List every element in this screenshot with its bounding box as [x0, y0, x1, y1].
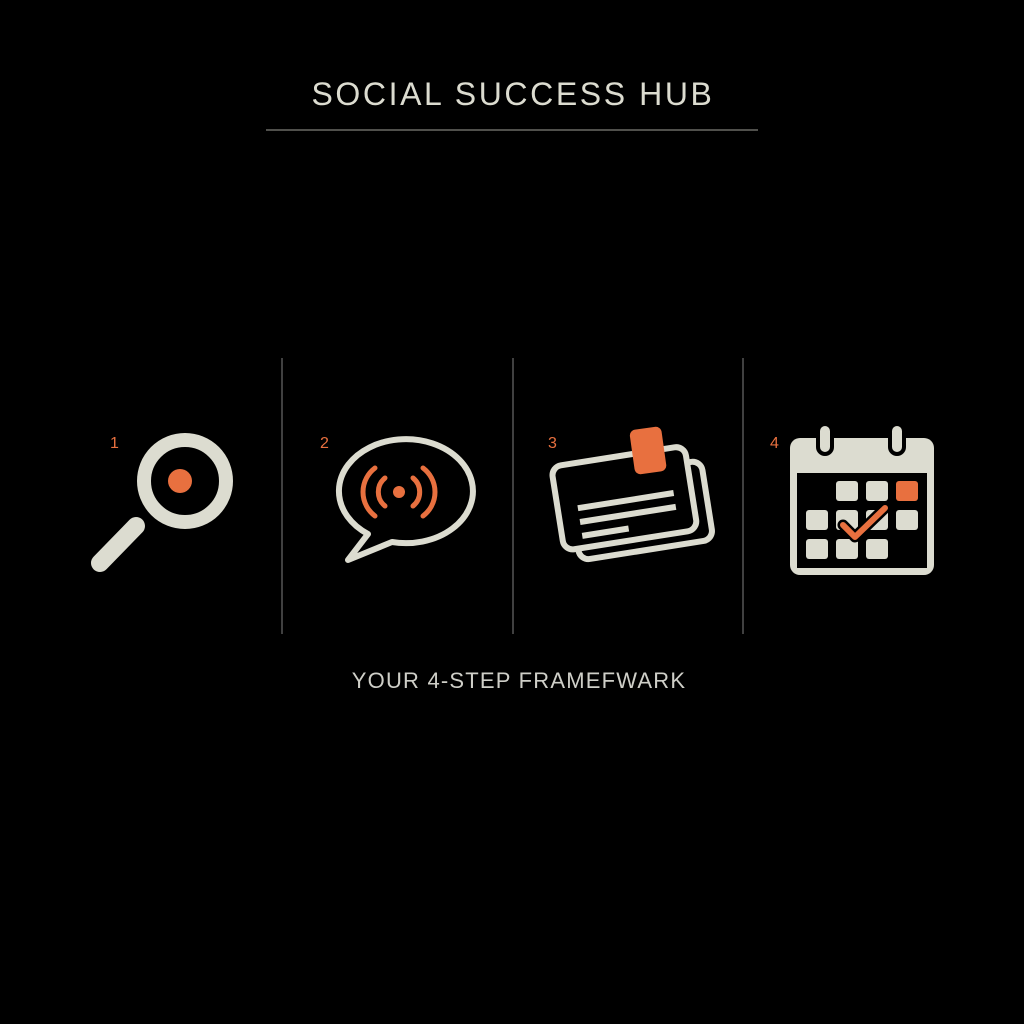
title: SOCIAL SUCCESS HUB [311, 76, 715, 112]
step 3: cards with tag [548, 426, 713, 563]
step 1: magnifier [100, 435, 226, 563]
step 2: speech bubble: 2 [320, 435, 329, 452]
step 1: magnifier: 1 [110, 435, 119, 452]
step 3: cards with tag: 3 [548, 435, 557, 452]
step 4: calendar: 4 [770, 435, 779, 452]
step 2: speech bubble [320, 435, 473, 560]
step 4: calendar [770, 424, 934, 575]
subtitle: YOUR 4-STEP FRAMEFWARK [352, 668, 686, 693]
